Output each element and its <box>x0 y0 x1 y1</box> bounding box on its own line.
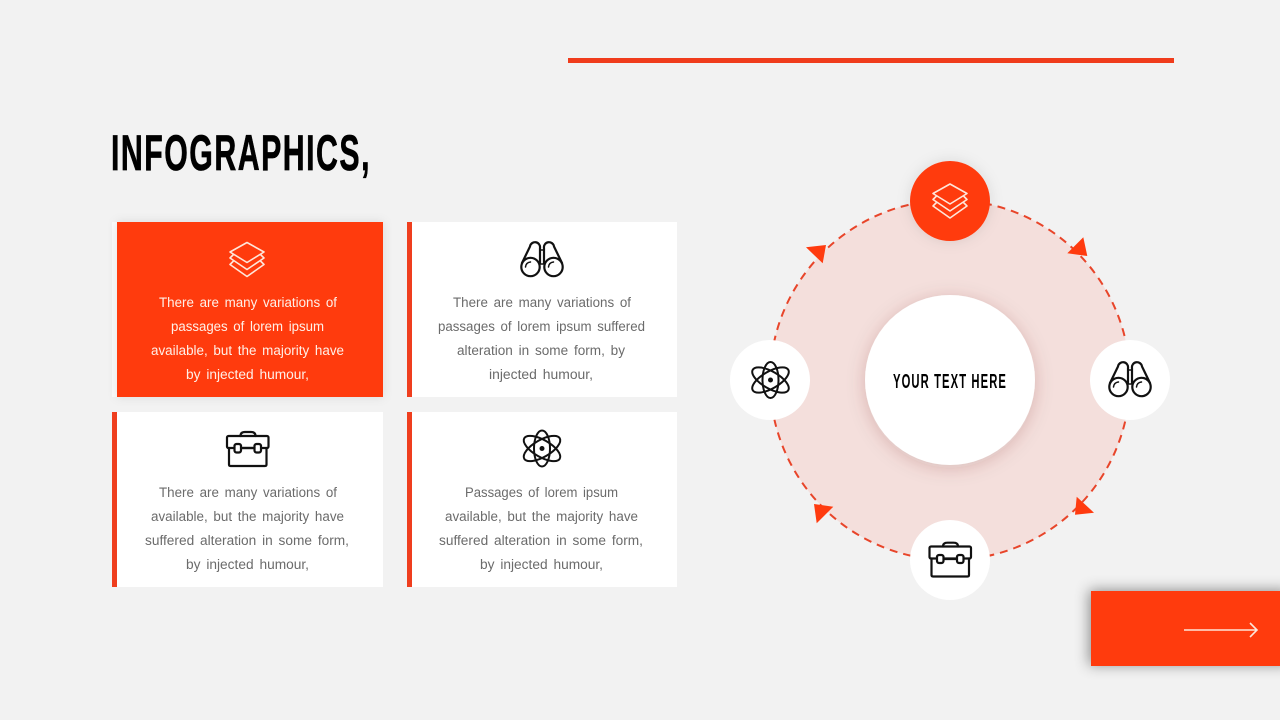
icon: atom <box>520 430 564 466</box>
icon: binoculars <box>521 242 563 276</box>
panel: card 2 <box>407 222 677 397</box>
card 1 text <box>151 295 344 382</box>
card 4 text: suffered alteration in some form, <box>439 533 643 548</box>
card 4 text <box>439 485 643 572</box>
card 3 text: There are many variations of <box>159 485 337 500</box>
icon: briefcase <box>227 432 268 466</box>
panel: card 1 (highlighted) <box>112 222 383 397</box>
card 2 text: alteration in some form, by <box>457 343 625 358</box>
next button <box>1091 591 1280 666</box>
card 3 text: by injected humour, <box>186 557 309 572</box>
icon: layers <box>230 242 264 276</box>
card 3 text: suffered alteration in some form, <box>145 533 349 548</box>
arrow: next <box>1184 623 1257 637</box>
center circle <box>865 295 1035 465</box>
arrow: top right <box>1067 237 1087 256</box>
card 3 text <box>145 485 349 572</box>
card 4 text: available, but the majority have <box>445 509 638 524</box>
cycle diagram <box>730 161 1170 600</box>
title: INFOGRAPHICS, <box>111 124 371 181</box>
card 2 text: injected humour, <box>489 367 593 382</box>
panel: card 4 <box>407 412 677 587</box>
card 3 text: available, but the majority have <box>151 509 344 524</box>
card 4 text: Passages of lorem ipsum <box>465 485 618 500</box>
card 1 text: There are many variations of <box>159 295 337 310</box>
card 2 text <box>438 295 645 382</box>
card 1 text: available, but the majority have <box>151 343 344 358</box>
arrow: top left <box>806 245 826 263</box>
card 1 text: by injected humour, <box>186 367 309 382</box>
node: binoculars <box>1090 340 1170 420</box>
panel: card 3 <box>112 412 383 587</box>
card 4 text: by injected humour, <box>480 557 603 572</box>
top accent bar <box>568 58 1174 63</box>
card 2 text: There are many variations of <box>453 295 631 310</box>
card 2 text: passages of lorem ipsum suffered <box>438 319 645 334</box>
arrow: bottom left <box>814 504 833 523</box>
node: layers <box>910 161 990 241</box>
center label: YOUR TEXT HERE <box>893 370 1007 393</box>
node: atom <box>730 340 810 420</box>
node: briefcase <box>910 520 990 600</box>
arrow: bottom right <box>1075 497 1094 515</box>
card 1 text: passages of lorem ipsum <box>171 319 324 334</box>
dashed ring <box>770 200 1130 560</box>
